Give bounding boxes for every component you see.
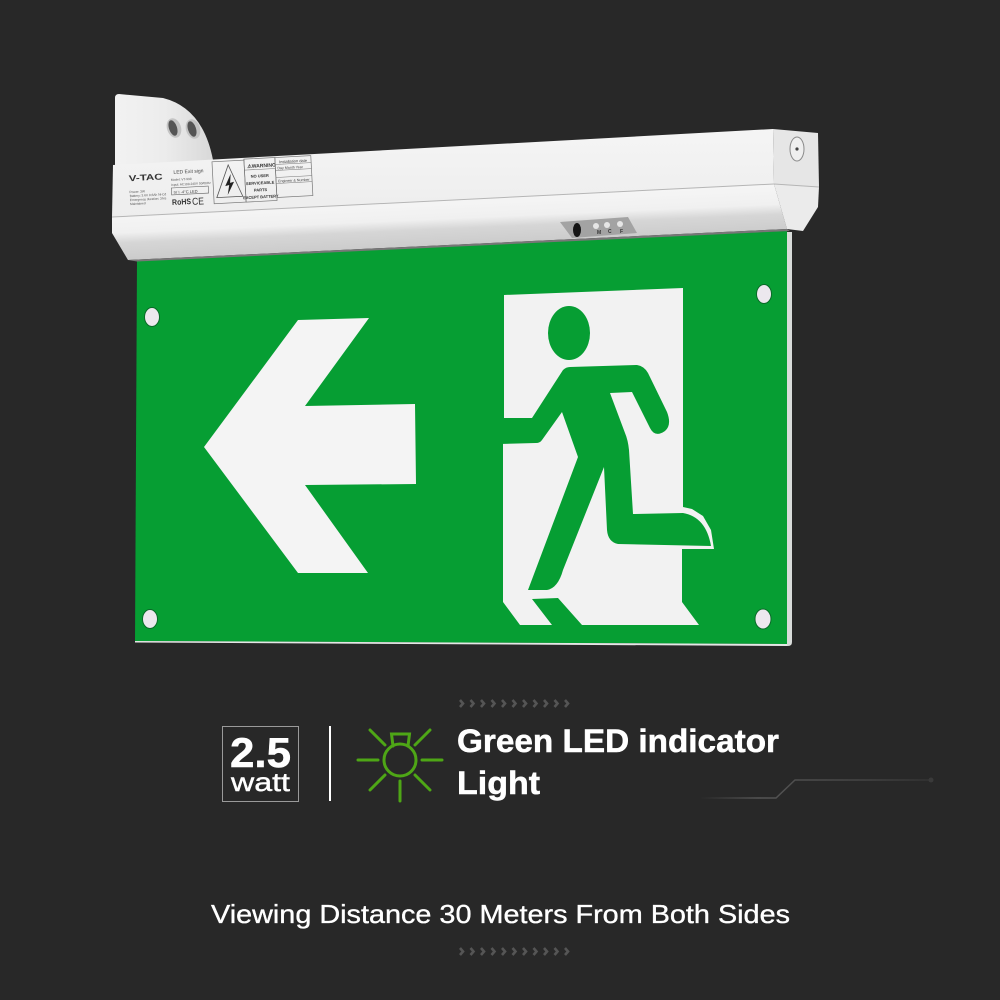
caption: viewing distance: Viewing Distance 30 Meters From Both Sides <box>211 899 790 929</box>
decorative chevrons: bottom <box>460 948 568 955</box>
product label: Maintained <box>130 201 146 206</box>
exit sign product <box>112 94 819 646</box>
product label: SERVICEABLE <box>246 180 275 186</box>
mounting screws <box>142 284 772 629</box>
decorative circuit line <box>700 778 934 798</box>
divider <box>329 726 331 801</box>
housing bar <box>112 129 819 262</box>
indicator panel: M <box>597 230 601 236</box>
product label: EXCEPT BATTERY <box>243 193 279 200</box>
product label: ⚠WARNING <box>247 162 276 170</box>
product label: NO USER <box>251 173 269 179</box>
product label: PARTS <box>254 187 268 193</box>
indicator panel: F <box>620 229 623 235</box>
icon: running man exit door <box>500 288 714 625</box>
product label: RoHS <box>172 197 192 207</box>
product label: LED Exit sign <box>173 168 204 176</box>
product label: Battery: 3.6V 0.6Ah Ni-Cd <box>130 192 167 198</box>
power rating badge: 2.5 <box>230 729 291 776</box>
wall bracket <box>115 94 214 170</box>
indicator panel <box>560 217 637 238</box>
product label: IV I -4°C LED <box>173 189 198 195</box>
product label: CE <box>192 196 205 208</box>
indicator panel: C <box>608 229 612 235</box>
product label: V-TAC <box>128 171 163 183</box>
product label: Day Month Year <box>277 165 304 170</box>
product label: Power: 3W <box>129 189 145 194</box>
green acrylic panel <box>135 231 792 646</box>
product label: Model: VT-998 <box>171 177 192 182</box>
heading: green LED indicator light <box>457 723 779 801</box>
power rating badge <box>222 726 298 802</box>
icon: left arrow <box>204 318 416 573</box>
product label: Engineer & Number <box>278 178 311 183</box>
icon: green light bulb <box>358 730 442 801</box>
product label: Emergency duration: 3hrs <box>130 196 167 202</box>
product label: Input: AC100-240V 50/60Hz <box>171 181 211 187</box>
end cap screw <box>790 137 804 161</box>
product label: Installation date <box>279 158 308 164</box>
heading: green LED indicator light: Green LED indicator <box>457 723 779 759</box>
power rating badge: watt <box>230 767 291 797</box>
decorative chevrons: top <box>460 700 568 707</box>
product label <box>128 156 313 211</box>
heading: green LED indicator light: Light <box>457 765 540 801</box>
